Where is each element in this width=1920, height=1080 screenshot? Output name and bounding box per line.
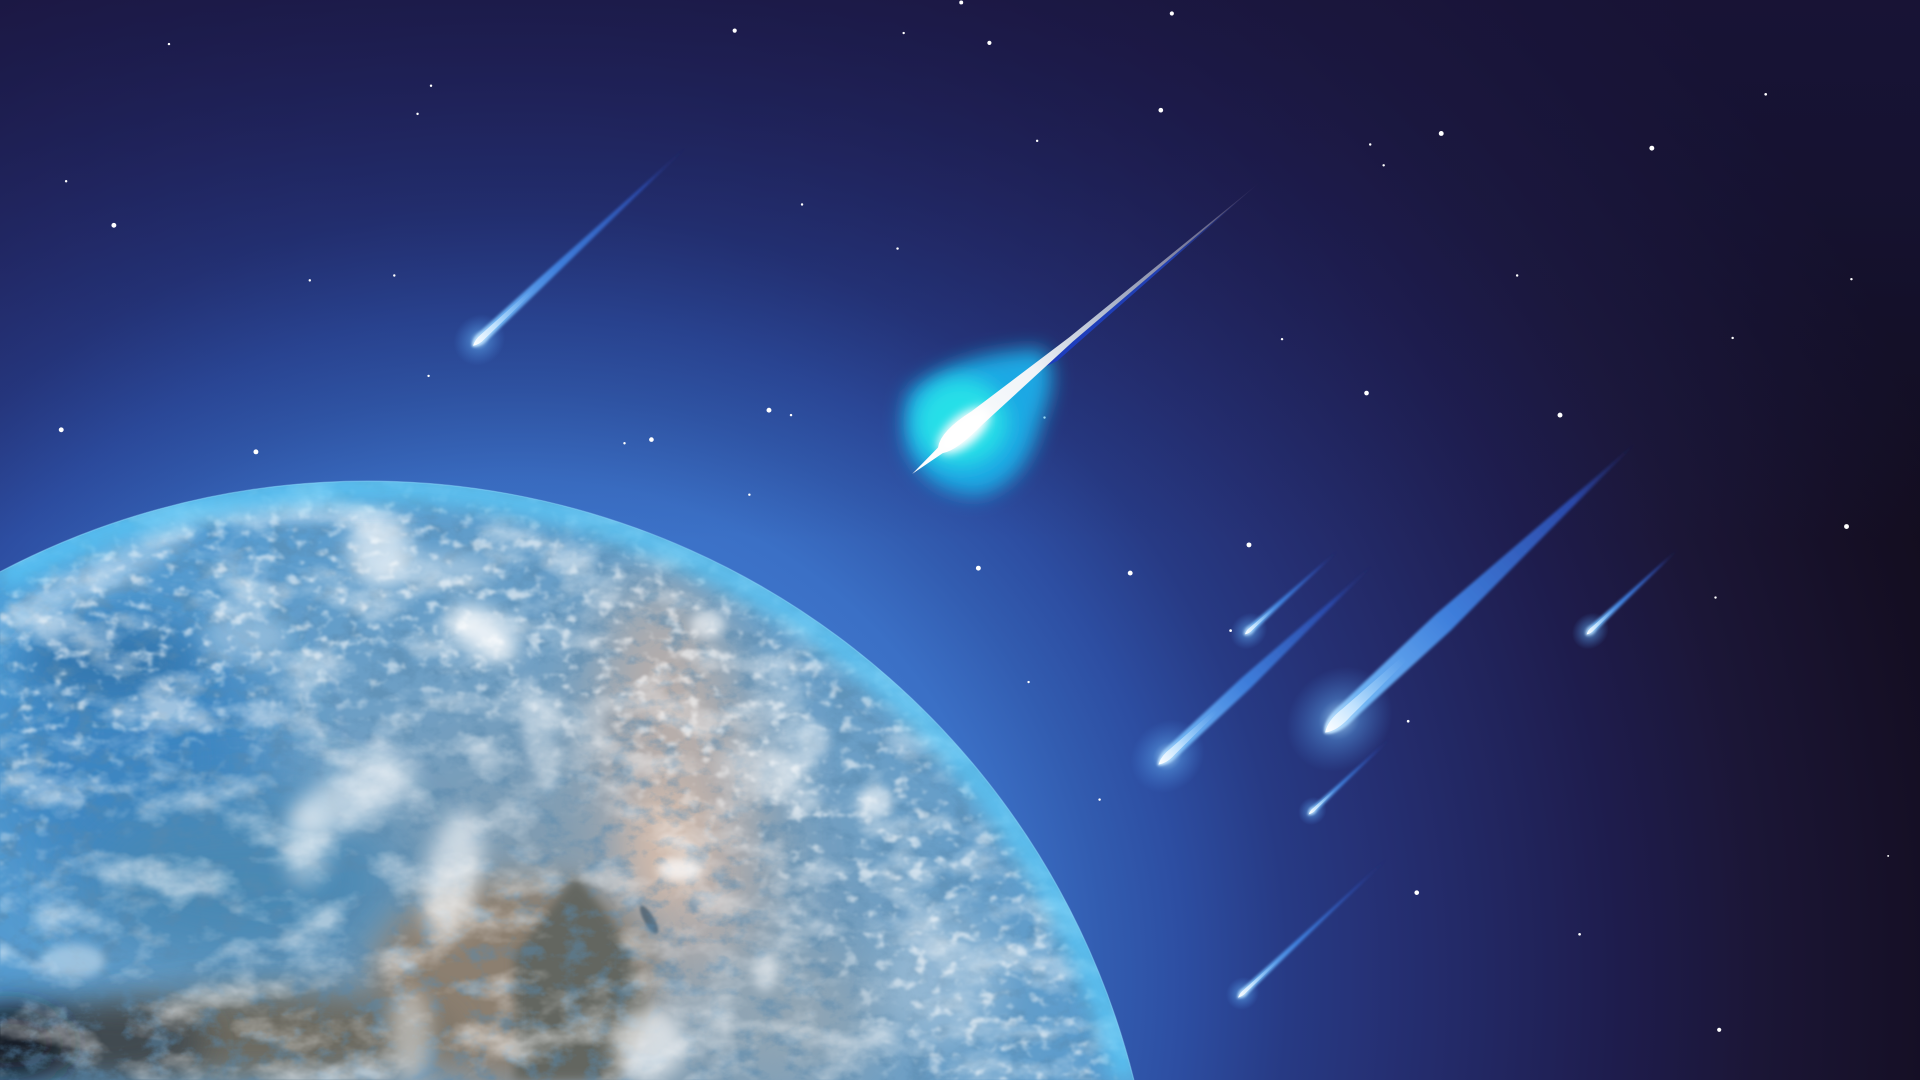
bright tail <box>905 172 1267 480</box>
meteor: largest blue <box>1265 407 1669 793</box>
planet Earth <box>0 465 1139 1080</box>
atmospheric limb glow <box>0 488 1128 1080</box>
cyan fireball glow <box>904 349 1052 496</box>
inner glow <box>915 378 1008 467</box>
meteor: small right <box>1564 536 1691 657</box>
scattered limb clouds <box>0 465 1139 1080</box>
surface shading texture <box>0 465 1139 1080</box>
earth base ocean <box>0 481 1134 1080</box>
continents <box>0 567 869 1080</box>
meteor: long centre <box>1115 539 1397 808</box>
meteor: small near centre right <box>1223 537 1350 657</box>
tail and core <box>903 170 1271 485</box>
turbulent cloud cover <box>0 465 1139 1080</box>
large cloud masses <box>0 500 1004 1080</box>
white hot core <box>930 399 998 462</box>
meteor: upper left <box>443 127 705 376</box>
blue tail shadow <box>1034 181 1266 377</box>
meteor: large cyan fireball <box>903 170 1271 496</box>
atmosphere edge <box>0 481 1134 1080</box>
meteor: small lower centre <box>1292 727 1401 831</box>
meteor: bottom <box>1219 845 1400 1017</box>
